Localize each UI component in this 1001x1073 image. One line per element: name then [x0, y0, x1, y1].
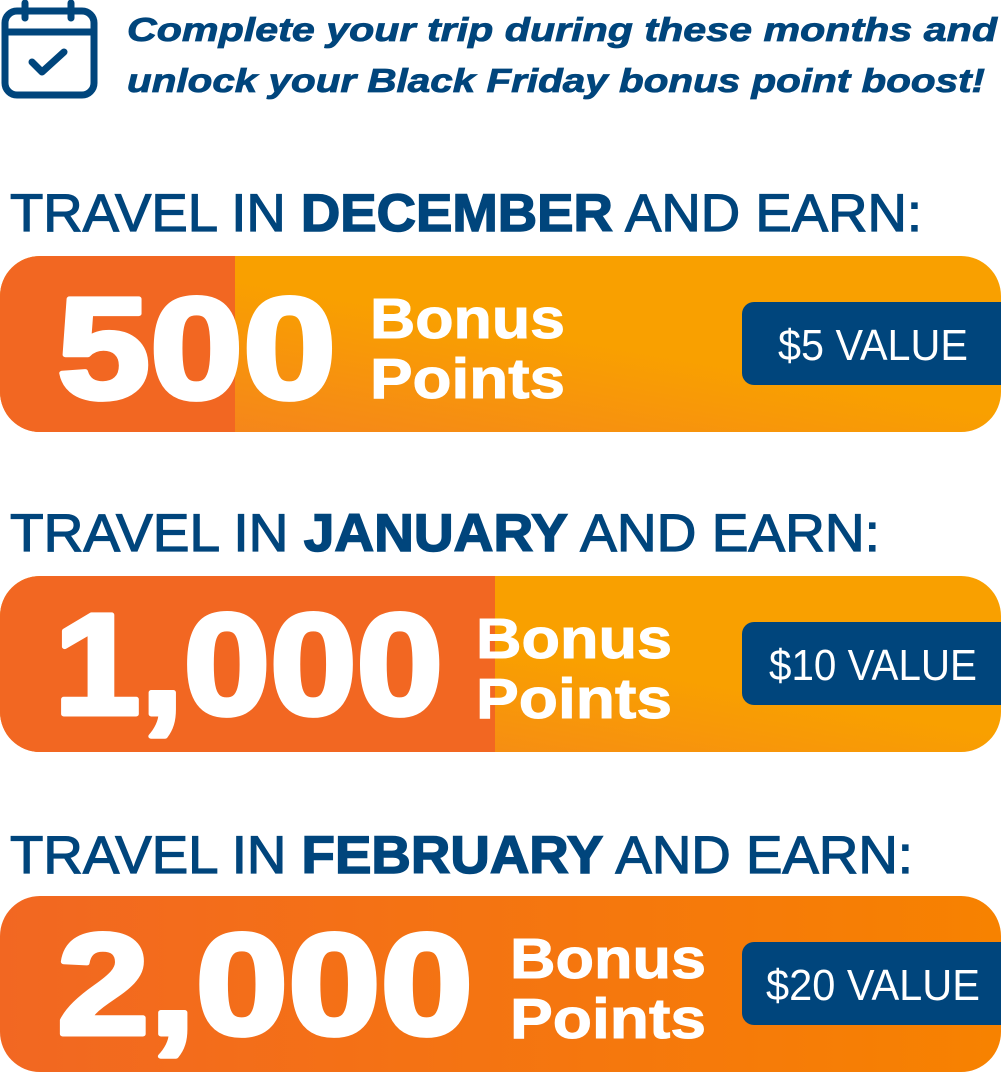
badge $5 value: $5 VALUE — [778, 321, 968, 370]
bar: january — [0, 576, 1001, 752]
number 2,000: 2,000 — [57, 904, 473, 1065]
label bonus points: Bonus — [476, 607, 672, 671]
intro text: unlock your Black Friday bonus point boost! — [127, 62, 985, 99]
heading: december: TRAVEL IN DECEMBER AND EARN: — [10, 184, 922, 243]
intro text: Complete your trip during these months and — [127, 11, 998, 48]
badge $5 value — [742, 302, 1001, 385]
bar: december — [0, 256, 1001, 432]
label bonus points — [480, 618, 670, 719]
label bonus points — [374, 298, 563, 399]
number 1,000: 1,000 — [54, 584, 443, 745]
number 500: 500 — [57, 268, 336, 429]
badge $10 value: $10 VALUE — [769, 641, 977, 690]
heading: january: TRAVEL IN JANUARY AND EARN: — [10, 504, 880, 563]
badge $20 value: $20 VALUE — [766, 961, 980, 1010]
label bonus points: Points — [510, 987, 706, 1051]
label bonus points — [510, 927, 706, 1051]
badge $20 value — [742, 942, 1001, 1025]
badge $10 value — [742, 622, 1001, 705]
label bonus points: Points — [370, 347, 565, 411]
label bonus points: Bonus — [510, 927, 706, 991]
icon: calendar — [5, 3, 94, 95]
intro text — [127, 11, 998, 99]
label bonus points: Points — [476, 667, 672, 731]
bar: february — [0, 896, 1001, 1072]
label bonus points: Bonus — [370, 287, 565, 351]
heading: february: TRAVEL IN FEBRUARY AND EARN: — [10, 826, 913, 885]
